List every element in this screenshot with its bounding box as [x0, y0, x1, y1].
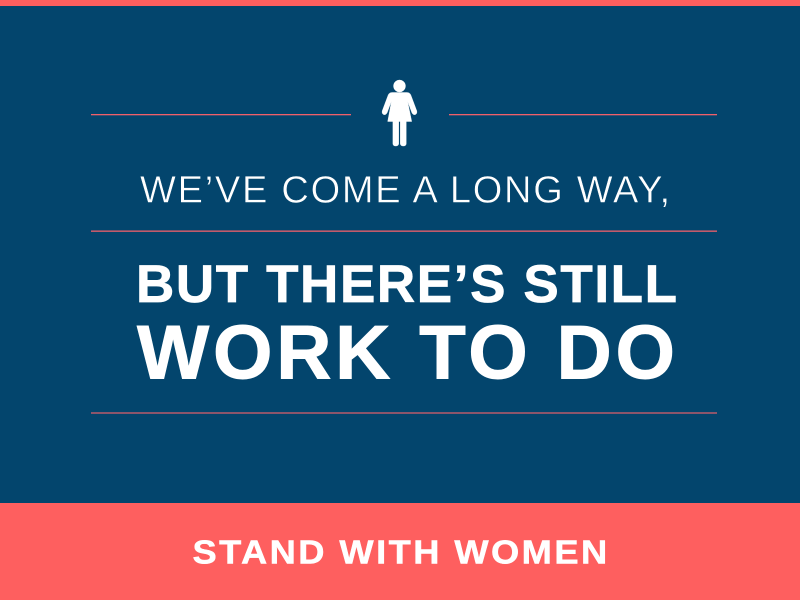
heading line: we've come a long way: WE’VE COME A LONG WAY,	[140, 170, 670, 212]
heading line: but there's still: BUT THERE’S STILL	[136, 255, 677, 314]
footer banner	[0, 503, 800, 600]
heading line: work to do: WORK TO DO	[137, 310, 675, 396]
footer text: STAND WITH WOMEN	[192, 535, 607, 571]
icon: woman figure	[382, 80, 417, 146]
top accent bar	[0, 0, 800, 6]
